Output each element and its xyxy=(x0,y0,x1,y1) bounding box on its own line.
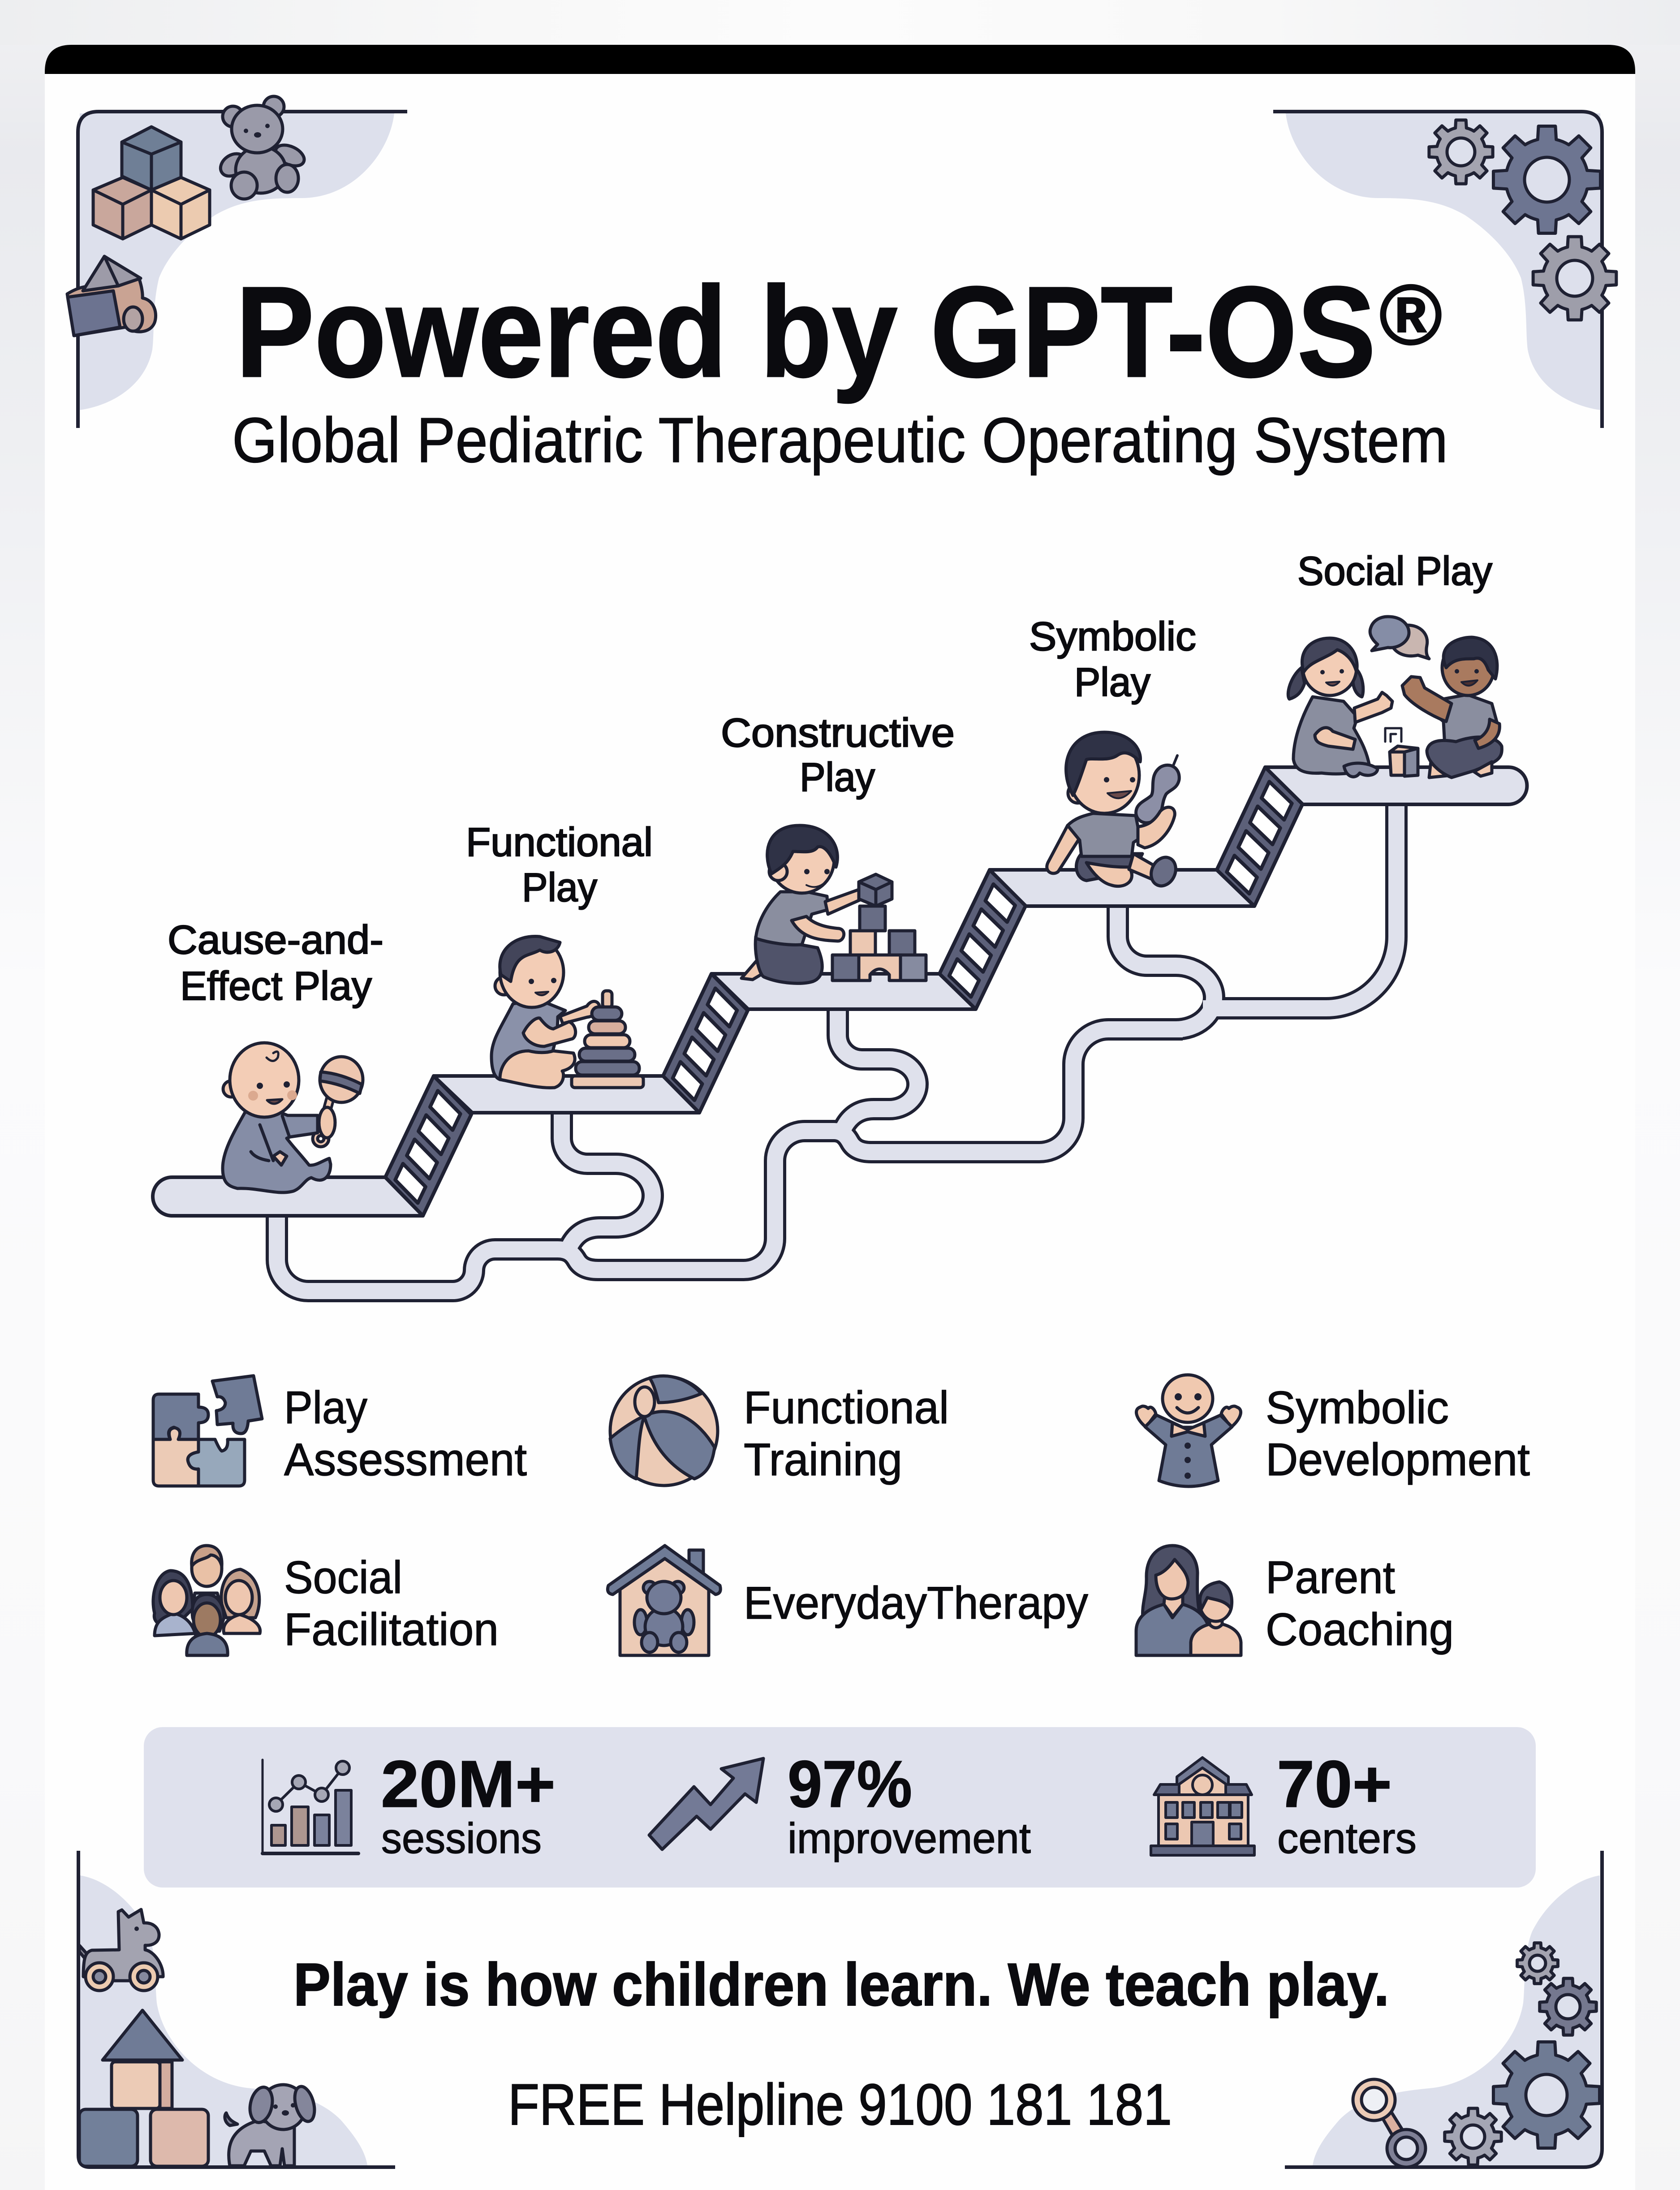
text: Symbolic xyxy=(1266,1382,1449,1433)
label: constructive play xyxy=(721,711,955,800)
child 5: two children playing xyxy=(1288,617,1502,778)
icon: puzzle xyxy=(153,1376,262,1486)
text: centers xyxy=(1277,1814,1417,1862)
text: Functional xyxy=(744,1382,949,1433)
title: ® xyxy=(1379,268,1442,363)
toy block xyxy=(1385,728,1418,776)
child 2: baby with ring stacker xyxy=(491,937,643,1088)
icon: ring stacker xyxy=(572,991,643,1088)
stat: 97% improvement xyxy=(649,1747,1031,1862)
label: functional play: Play xyxy=(522,865,597,910)
text xyxy=(284,1382,527,1485)
text: improvement xyxy=(788,1814,1031,1862)
icon: puppet xyxy=(1136,1375,1241,1486)
text: Coaching xyxy=(1266,1604,1454,1655)
text xyxy=(744,1382,949,1485)
child 3: child building blocks xyxy=(741,825,926,983)
ladder 3 xyxy=(939,870,1026,1009)
text xyxy=(788,1747,1031,1862)
ladder 1 xyxy=(385,1076,471,1216)
icon: ring rattle xyxy=(1353,2079,1426,2167)
label: symbolic play: Symbolic xyxy=(1029,614,1196,659)
icon: toy phone xyxy=(1136,756,1179,823)
icon: toy car xyxy=(67,256,156,336)
icon: small gear xyxy=(1517,1943,1558,1983)
text xyxy=(1266,1552,1454,1655)
corner decoration: bottom left xyxy=(78,1851,395,2167)
label: functional play xyxy=(466,820,653,910)
title: Powered by GPT-OS xyxy=(236,260,1376,405)
text xyxy=(284,1552,499,1655)
platform 4 xyxy=(990,870,1254,906)
label: constructive play: Play xyxy=(800,755,875,800)
icon: puppy xyxy=(225,2084,318,2166)
icon: mid gear xyxy=(1540,1978,1596,2035)
platform 5 xyxy=(1265,767,1527,804)
text: sessions xyxy=(381,1814,542,1862)
platform 1 xyxy=(153,1177,423,1216)
icon: large gear xyxy=(1493,2042,1600,2148)
text: 97% xyxy=(788,1747,912,1821)
child 4: child with toy phone xyxy=(1047,732,1180,890)
text: Facilitation xyxy=(284,1604,499,1655)
text: Social xyxy=(284,1552,402,1603)
icon: rising arrow xyxy=(649,1758,763,1849)
label: constructive play: Constructive xyxy=(721,711,955,756)
text: 20M+ xyxy=(381,1747,556,1821)
icon: toy dog on wheels xyxy=(79,1909,163,1991)
text: Assessment xyxy=(284,1434,527,1485)
ladder 2 xyxy=(663,974,748,1113)
feature: symbolic development xyxy=(1136,1375,1530,1486)
icon: medium gear xyxy=(1533,237,1616,320)
feature: play assessment xyxy=(153,1376,527,1486)
label: social play: Social Play xyxy=(1297,549,1492,594)
staircase platforms and ladders xyxy=(153,767,1527,1216)
stat: 70+ centers xyxy=(1151,1747,1417,1862)
label: cause-and-effect play xyxy=(168,918,383,1009)
label: symbolic play xyxy=(1029,614,1196,705)
icon: house with bear xyxy=(607,1546,720,1655)
icon: parent and child xyxy=(1136,1546,1241,1655)
subtitle: Global Pediatric Therapeutic Operating System xyxy=(232,405,1448,476)
ladder 4 xyxy=(1217,767,1303,906)
label: cause-and-effect play: Effect Play xyxy=(180,964,372,1009)
helpline: FREE Helpline 9100 181 181 xyxy=(508,2072,1172,2137)
text xyxy=(381,1747,556,1862)
stage labels xyxy=(168,549,1492,1009)
speech bubbles xyxy=(1370,617,1429,659)
icon: teddy bear xyxy=(216,96,307,199)
corner decoration: top left xyxy=(67,96,407,428)
feature: parent coaching xyxy=(1136,1546,1454,1655)
corner decoration: bottom right xyxy=(1285,1851,1602,2167)
text xyxy=(1266,1382,1530,1485)
corner decoration: top right xyxy=(1273,112,1616,428)
label: functional play: Functional xyxy=(466,820,653,865)
platform 2 xyxy=(434,1076,699,1113)
text: Training xyxy=(744,1434,902,1485)
text: Development xyxy=(1266,1434,1530,1485)
label: cause-and-effect play: Cause-and- xyxy=(168,918,383,963)
icon: block house xyxy=(79,2010,208,2166)
child 1: baby with rattle xyxy=(223,1043,363,1192)
icon: stacked cubes xyxy=(93,127,210,239)
icon: large gear xyxy=(1493,126,1601,233)
icon: group of people xyxy=(153,1546,260,1655)
stat: 20M+ sessions xyxy=(263,1747,556,1862)
text: 70+ xyxy=(1277,1747,1392,1821)
text: Play xyxy=(284,1382,367,1433)
icon: lower gear xyxy=(1445,2108,1501,2165)
icon: beach ball xyxy=(610,1376,718,1486)
icon: small gear xyxy=(1429,120,1493,184)
icon: block tower xyxy=(832,874,926,981)
text: EverydayTherapy xyxy=(744,1577,1088,1628)
icon: school building xyxy=(1151,1758,1254,1855)
text xyxy=(1277,1747,1417,1862)
label: symbolic play: Play xyxy=(1074,660,1150,705)
feature: functional training xyxy=(610,1376,949,1486)
feature: social facilitation xyxy=(153,1546,499,1655)
text: Parent xyxy=(1266,1552,1395,1603)
icon: bar chart xyxy=(263,1760,358,1853)
platform 3 xyxy=(712,974,976,1009)
feature: everyday therapy xyxy=(607,1546,1088,1655)
tagline: Play is how children learn. We teach play. xyxy=(293,1951,1389,2018)
stats band xyxy=(144,1727,1536,1888)
staircase connecting pipes xyxy=(277,800,1396,1291)
